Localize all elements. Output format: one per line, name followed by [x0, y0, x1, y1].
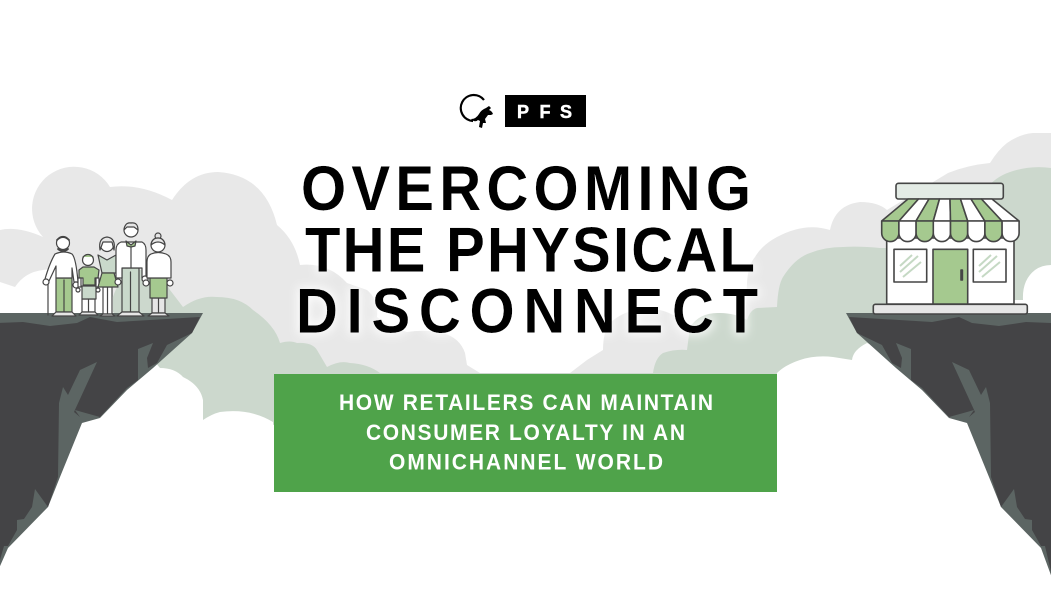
right window	[973, 249, 1006, 282]
PFS badge	[505, 95, 586, 127]
girl	[98, 237, 118, 316]
left cliff	[0, 313, 203, 573]
grandfather	[43, 236, 79, 316]
store base	[873, 304, 1027, 314]
title	[296, 153, 758, 346]
icon: ring and gecko	[461, 95, 493, 128]
logo	[461, 95, 586, 128]
title: THE PHYSICAL	[305, 214, 755, 285]
title: OVERCOMING	[301, 153, 751, 224]
father	[115, 223, 148, 316]
left window	[894, 249, 927, 282]
child	[76, 254, 100, 315]
subtitle banner	[274, 374, 777, 492]
grandmother	[143, 233, 173, 316]
title: DISCONNECT	[296, 275, 758, 346]
background: white clouds left	[0, 269, 280, 600]
door	[933, 249, 968, 304]
background: green clouds	[113, 167, 1051, 430]
background: white clouds right	[270, 265, 1051, 600]
icon: storefront	[873, 183, 1027, 314]
right cliff	[846, 313, 1051, 578]
icon: family on the cliff	[43, 223, 173, 316]
awning scallops	[882, 221, 1019, 242]
awning stripes	[882, 199, 1019, 221]
store wall	[887, 238, 1014, 304]
PFS badge: P	[517, 102, 529, 122]
store sign	[896, 183, 1003, 199]
PFS badge: F	[540, 102, 550, 122]
subtitle banner: HOW RETAILERS CAN MAINTAIN	[339, 391, 713, 415]
background: grey clouds	[0, 133, 1051, 380]
subtitle banner: CONSUMER LOYALTY IN AN	[366, 421, 685, 445]
subtitle banner: OMNICHANNEL WORLD	[389, 450, 663, 475]
PFS badge: S	[560, 102, 572, 122]
